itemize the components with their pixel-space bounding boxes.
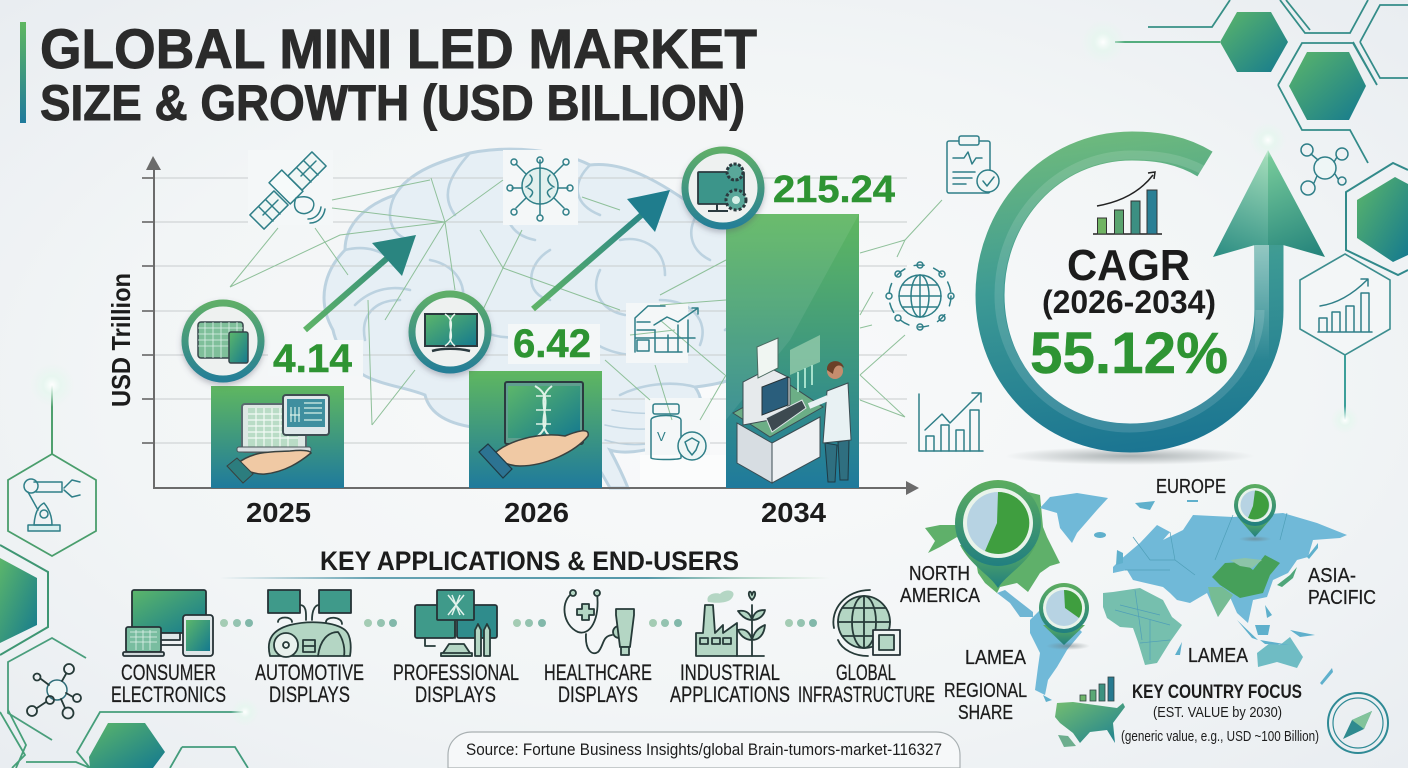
icon: compass	[1328, 693, 1388, 753]
left hexagon with robot arm	[8, 363, 96, 556]
China	[1212, 555, 1280, 598]
network lines	[230, 178, 942, 425]
application: global infrastructure	[798, 590, 935, 707]
CAGR panel	[990, 122, 1325, 465]
mini bar chart	[1093, 172, 1162, 234]
icon: factory and plant	[696, 591, 765, 656]
x axis arrow	[906, 481, 919, 495]
Eurasia	[1113, 513, 1347, 623]
icon: satellite	[250, 152, 326, 229]
country borders	[1045, 513, 1287, 660]
filled hexagon	[89, 723, 165, 768]
outlined chart hexagon	[1300, 254, 1390, 355]
world map	[925, 490, 1347, 702]
left molecule hexagon	[8, 638, 86, 740]
map labels: EUROPE	[1156, 476, 1226, 498]
title accent bar	[20, 22, 26, 123]
map labels: ASIA-	[1308, 565, 1356, 587]
source box	[448, 732, 960, 768]
y axis arrow	[146, 156, 161, 170]
icon: molecule top right	[1301, 144, 1348, 195]
y axis label: USD Trillion	[106, 273, 136, 407]
Central America	[997, 590, 1033, 617]
icon: clipboard	[947, 136, 999, 193]
application: automotive displays	[255, 590, 364, 707]
source box: Source: Fortune Business Insights/global Brain-tumors-market-116327	[466, 740, 942, 759]
CAGR value: 55.12%	[1030, 321, 1228, 386]
application: consumer electronics: ELECTRONICS	[111, 682, 226, 707]
filled hexagon 3	[1357, 177, 1408, 262]
icon: globe and chip	[833, 590, 900, 656]
ring shadow	[1005, 447, 1255, 465]
map labels: SHARE	[958, 702, 1013, 724]
Australia	[1257, 637, 1303, 668]
map pin: Europe	[1234, 484, 1276, 542]
application: consumer electronics	[111, 590, 226, 707]
title block	[20, 17, 757, 131]
icon: car cockpit	[268, 590, 351, 657]
map pin: LAMEA	[1039, 583, 1090, 650]
South America	[1030, 610, 1082, 695]
growth arrow 2	[533, 190, 670, 309]
year labels: 2026	[504, 497, 569, 528]
application: professional displays	[393, 590, 519, 707]
Greenland	[1040, 493, 1108, 543]
bar 2026	[469, 371, 602, 488]
brain illustration	[324, 149, 787, 488]
bar 2034	[726, 214, 859, 488]
application: professional displays: DISPLAYS	[415, 682, 496, 707]
value: 4.14: 4.14	[273, 337, 353, 381]
growth arrow 1	[305, 235, 416, 330]
icon: lab technician at workstation	[733, 335, 851, 483]
map labels	[900, 476, 1376, 724]
application: global infrastructure: INFRASTRUCTURE	[798, 682, 935, 707]
title line 1: GLOBAL MINI LED MARKET	[40, 17, 757, 80]
application: automotive displays: AUTOMOTIVE	[255, 660, 364, 685]
map pin: North America	[955, 480, 1041, 588]
title line 2: SIZE & GROWTH (USD BILLION)	[40, 75, 745, 131]
icon: connected globe	[886, 262, 954, 330]
left filled hexagon	[0, 545, 48, 655]
circular growth arrow	[990, 122, 1325, 438]
map labels: PACIFIC	[1308, 587, 1376, 609]
icon: supplement bottle: V	[657, 429, 666, 444]
bar 2025	[211, 386, 344, 488]
icon: hand holding devices	[227, 395, 329, 483]
icon: consumer devices	[123, 590, 213, 656]
badge: monitor and gears 2034	[685, 150, 761, 226]
white patches behind floating icons	[248, 150, 726, 487]
right hexagon with chart icon	[1300, 163, 1408, 434]
badge: DNA display 2026	[412, 294, 488, 370]
year labels	[246, 497, 826, 528]
icon: molecule	[27, 664, 81, 718]
application: healthcare displays: HEALTHCARE	[544, 660, 652, 685]
icon: supplement bottle	[651, 404, 706, 460]
islands	[1043, 500, 1333, 702]
year labels: 2034	[761, 497, 826, 528]
application: automotive displays: DISPLAYS	[269, 682, 350, 707]
icon: professional workstation	[415, 590, 497, 656]
map labels: NORTH	[909, 563, 970, 585]
application: consumer electronics: CONSUMER	[121, 660, 216, 685]
icon: hand holding laptop with DNA	[479, 382, 588, 478]
year labels: 2025	[246, 497, 311, 528]
chart grid and axes	[106, 156, 919, 495]
map labels: LAMEA	[965, 647, 1027, 669]
CAGR label: CAGR	[1067, 241, 1190, 290]
focus note: (generic value, e.g., USD ~100 Billion)	[1121, 728, 1319, 745]
icon: mini bars	[1080, 677, 1114, 701]
application: professional displays: PROFESSIONAL	[393, 660, 519, 685]
icon: rising chart	[919, 393, 983, 451]
map labels: LAMEA	[1188, 645, 1249, 667]
CAGR period: (2026-2034)	[1042, 284, 1216, 320]
India	[1208, 587, 1233, 617]
application: global infrastructure: GLOBAL	[836, 660, 896, 685]
key country focus	[1055, 677, 1319, 747]
application: industrial applications	[670, 591, 790, 707]
Mongolia	[1230, 558, 1262, 568]
value: 215.24: 215.24	[773, 169, 895, 211]
filled hexagon 1	[1220, 12, 1288, 72]
filled hexagon 2	[1289, 52, 1366, 120]
icon: robot arm	[24, 479, 80, 531]
connector dots	[220, 619, 817, 627]
North America	[925, 490, 1060, 593]
focus heading: KEY COUNTRY FOCUS	[1132, 682, 1302, 703]
map labels: AMERICA	[900, 585, 981, 607]
y axis	[154, 168, 910, 488]
Africa	[1103, 588, 1182, 665]
icon: neural brain	[507, 157, 573, 221]
top right hexagon cluster	[1081, 0, 1408, 163]
icon: report with chart	[635, 306, 698, 352]
value: 6.42: 6.42	[513, 322, 591, 366]
map labels: REGIONAL	[944, 680, 1027, 702]
focus subheading: (EST. VALUE by 2030)	[1153, 704, 1282, 721]
bottom-left hexagons	[0, 698, 259, 768]
icon: stethoscope and tube	[564, 590, 634, 655]
section heading: key applications: KEY APPLICATIONS & END-USERS	[320, 546, 739, 576]
application: industrial applications: INDUSTRIAL	[680, 660, 780, 685]
icon: USA map	[1055, 702, 1125, 743]
application: healthcare displays: DISPLAYS	[558, 682, 638, 707]
application: industrial applications: APPLICATIONS	[670, 682, 790, 707]
badge: devices 2025	[185, 303, 261, 379]
application: healthcare displays	[544, 590, 652, 707]
